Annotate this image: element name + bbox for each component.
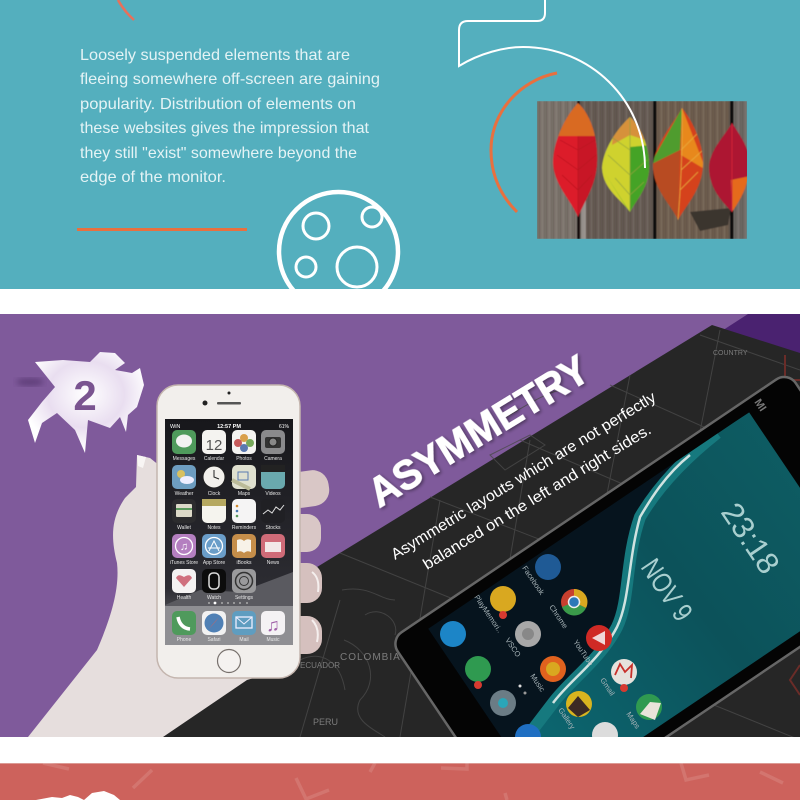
iOS app labels: iBooks (236, 560, 252, 566)
iOS app labels: Camera (264, 456, 282, 462)
torn paper badge with number 2 (16, 352, 144, 453)
map labels: COLOMBIA (340, 652, 401, 663)
map grid lines and outlines (300, 330, 800, 740)
iOS app labels: Mail (239, 637, 249, 643)
icon: moon with craters (276, 190, 400, 289)
hand holding phone (28, 455, 331, 737)
leaf 2: yellow green (600, 115, 652, 215)
number 2: 2 (73, 372, 97, 419)
app icons (440, 554, 662, 750)
body text: asymmetry description: Asymmetric layouts which are not perfectly (388, 389, 659, 563)
iOS app labels: Clock (208, 491, 221, 497)
panel: red next section (0, 763, 800, 800)
iPhone: 61% (279, 424, 290, 430)
body text: floating elements: fleeing somewhere off-screen are gaining (80, 71, 380, 88)
app labels: Music (528, 672, 547, 694)
iOS app labels: Wallet (177, 525, 191, 531)
body text: floating elements: they still "exist" somewhere beyond the (80, 145, 357, 162)
iOS app labels: Calendar (204, 456, 224, 462)
map labels: ECUADOR (300, 661, 340, 670)
app labels: VSCO (503, 636, 523, 659)
app labels: Facebook (520, 564, 546, 597)
leaf 3: green orange (652, 108, 704, 220)
iOS app labels (170, 456, 282, 643)
iPhone: 12:57 PM (217, 424, 241, 430)
iOS app labels: Safari (207, 637, 221, 643)
iOS app labels: Music (266, 637, 280, 643)
leaf 4: crimson (708, 122, 747, 213)
dark purple corner (725, 314, 800, 353)
faint confetti marks (43, 763, 783, 800)
iOS app labels: Reminders (232, 525, 257, 531)
iOS app labels: Health (177, 595, 191, 601)
red arc accent top (118, 0, 134, 20)
iOS app labels: Maps (238, 491, 251, 497)
fingers (300, 470, 330, 508)
panel: teal floating elements section (0, 0, 800, 311)
clock and date: 23:18 (714, 496, 787, 580)
Android phone (394, 376, 800, 737)
iOS app labels: Watch (207, 595, 221, 601)
leaf 1: red (552, 102, 598, 218)
map stamp marks (785, 355, 800, 695)
white outline numeral stroke (459, 0, 645, 168)
body text: floating elements: popularity. Distribution of elements on (80, 96, 356, 113)
iPhone: WiN (170, 424, 180, 430)
body text: floating elements: these websites gives the impression that (80, 120, 370, 137)
iOS app icons (172, 430, 285, 635)
app labels: Gallery (556, 706, 577, 731)
iOS app labels: iTunes Store (170, 560, 198, 566)
map labels: COUNTRY (713, 350, 748, 357)
app labels: Gmail (598, 676, 617, 698)
body text: floating elements: edge of the monitor. (80, 169, 226, 186)
iOS app labels: News (267, 560, 280, 566)
iOS app labels: Messages (173, 456, 196, 462)
iPhone screen (165, 419, 293, 605)
map labels (300, 350, 748, 727)
iOS app labels: App Store (203, 560, 225, 566)
iOS app labels: Phone (177, 637, 191, 643)
app labels: Chrome (547, 603, 570, 630)
iOS app labels: Videos (265, 491, 281, 497)
iOS app labels: Photos (236, 456, 252, 462)
thumb nail (137, 455, 146, 468)
iOS app icons: 12 (206, 437, 222, 454)
torn paper badge top (36, 791, 120, 800)
ocean wallpaper (539, 412, 800, 737)
orange arc (491, 73, 557, 212)
iOS app labels: Weather (175, 491, 194, 497)
iPhone (157, 385, 300, 678)
phone logo: MI (752, 397, 768, 414)
map background (100, 325, 800, 740)
orange divider line (77, 228, 247, 231)
Android phone: NOV 9 (635, 553, 699, 627)
app labels: Maps (624, 710, 642, 731)
body text: floating elements: Loosely suspended elements that are (80, 47, 350, 64)
body text: asymmetry description: balanced on the left and right sides. (420, 421, 654, 573)
iOS app icons: ♫ (180, 541, 188, 553)
iOS app labels: Stocks (265, 525, 281, 531)
iOS app labels: Notes (207, 525, 221, 531)
app labels: PlayMemori.. (472, 593, 504, 634)
iOS app icons: ♫ (266, 615, 280, 635)
iOS app labels: Settings (235, 595, 254, 601)
heading: ASYMMETRY: ASYMMETRY (360, 346, 597, 516)
photo: four autumn leaves on wood (537, 100, 752, 239)
app labels: YouTube (571, 638, 595, 668)
panel: purple asymmetry section (0, 314, 800, 737)
app labels (472, 564, 642, 731)
map labels: PERU (313, 717, 338, 727)
